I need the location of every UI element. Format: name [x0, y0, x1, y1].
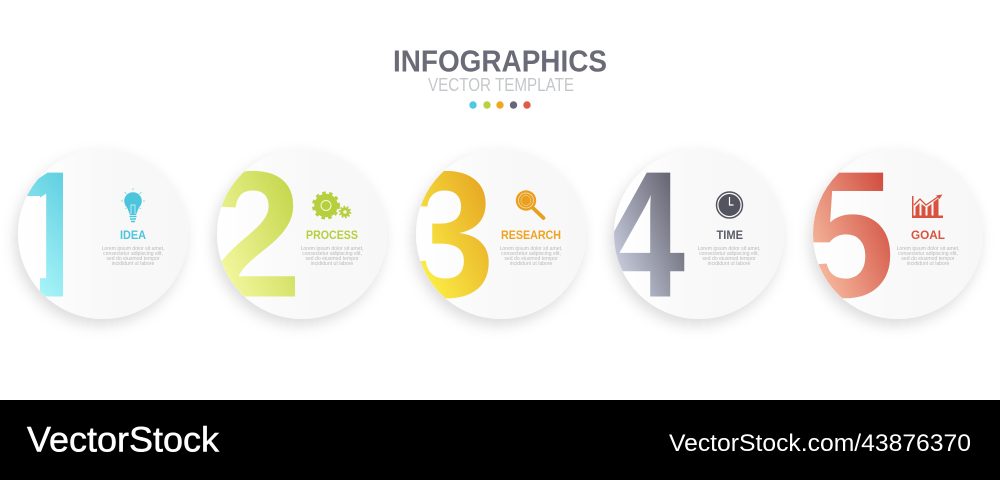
description: consectetur adipiscing elit,	[699, 251, 759, 257]
icon: clock	[716, 192, 742, 218]
panel: step 3 research	[408, 158, 588, 330]
description: consectetur adipiscing elit,	[103, 251, 163, 257]
description: incididunt ut labore	[311, 261, 354, 267]
label: GOAL	[911, 228, 945, 242]
panel: step 1 idea	[10, 158, 190, 330]
description: incididunt ut labore	[510, 261, 553, 267]
label: TIME	[716, 228, 743, 242]
image url: VectorStock.com/43876370	[669, 430, 971, 457]
icon: growth chart	[912, 194, 943, 218]
icon: magnifier	[516, 190, 544, 218]
colour dots	[469, 101, 531, 109]
description: sed do eiusmod tempor	[504, 256, 558, 262]
description: consectetur adipiscing elit,	[501, 251, 561, 257]
description: Lorem ipsum dolor sit amet,	[698, 246, 760, 252]
number 5: 5	[797, 134, 895, 335]
icon: light bulb	[121, 188, 145, 222]
description: Lorem ipsum dolor sit amet,	[102, 246, 164, 252]
brand name: VectorStock	[27, 420, 220, 460]
description: incididunt ut labore	[907, 261, 950, 267]
description: sed do eiusmod tempor	[702, 256, 756, 262]
label: PROCESS	[306, 228, 358, 242]
description: Lorem ipsum dolor sit amet,	[500, 246, 562, 252]
description: sed do eiusmod tempor	[901, 256, 955, 262]
label: IDEA	[120, 228, 146, 242]
title	[393, 44, 607, 109]
description	[698, 246, 760, 267]
description: consectetur adipiscing elit,	[898, 251, 958, 257]
description	[500, 246, 562, 267]
description: Lorem ipsum dolor sit amet,	[897, 246, 959, 252]
number 2: 2	[204, 134, 302, 335]
description: incididunt ut labore	[708, 261, 751, 267]
number 4: 4	[600, 135, 685, 335]
panel: step 5 goal	[806, 158, 984, 330]
description	[301, 246, 363, 267]
description: consectetur adipiscing elit,	[302, 251, 362, 257]
description: incididunt ut labore	[112, 261, 155, 267]
description	[897, 246, 959, 267]
subtitle: VECTOR TEMPLATE	[428, 75, 574, 95]
panel: step 4 time	[606, 158, 786, 330]
description	[102, 246, 164, 267]
number 3: 3	[397, 134, 495, 335]
icon: gears	[314, 193, 350, 218]
description: Lorem ipsum dolor sit amet,	[301, 246, 363, 252]
description: sed do eiusmod tempor	[106, 256, 160, 262]
heading: INFOGRAPHICS	[393, 44, 607, 78]
number 1: 1	[5, 134, 103, 335]
footer bar	[0, 400, 1000, 480]
panel: step 2 process	[210, 158, 388, 330]
description: sed do eiusmod tempor	[305, 256, 359, 262]
label: RESEARCH	[501, 228, 561, 242]
